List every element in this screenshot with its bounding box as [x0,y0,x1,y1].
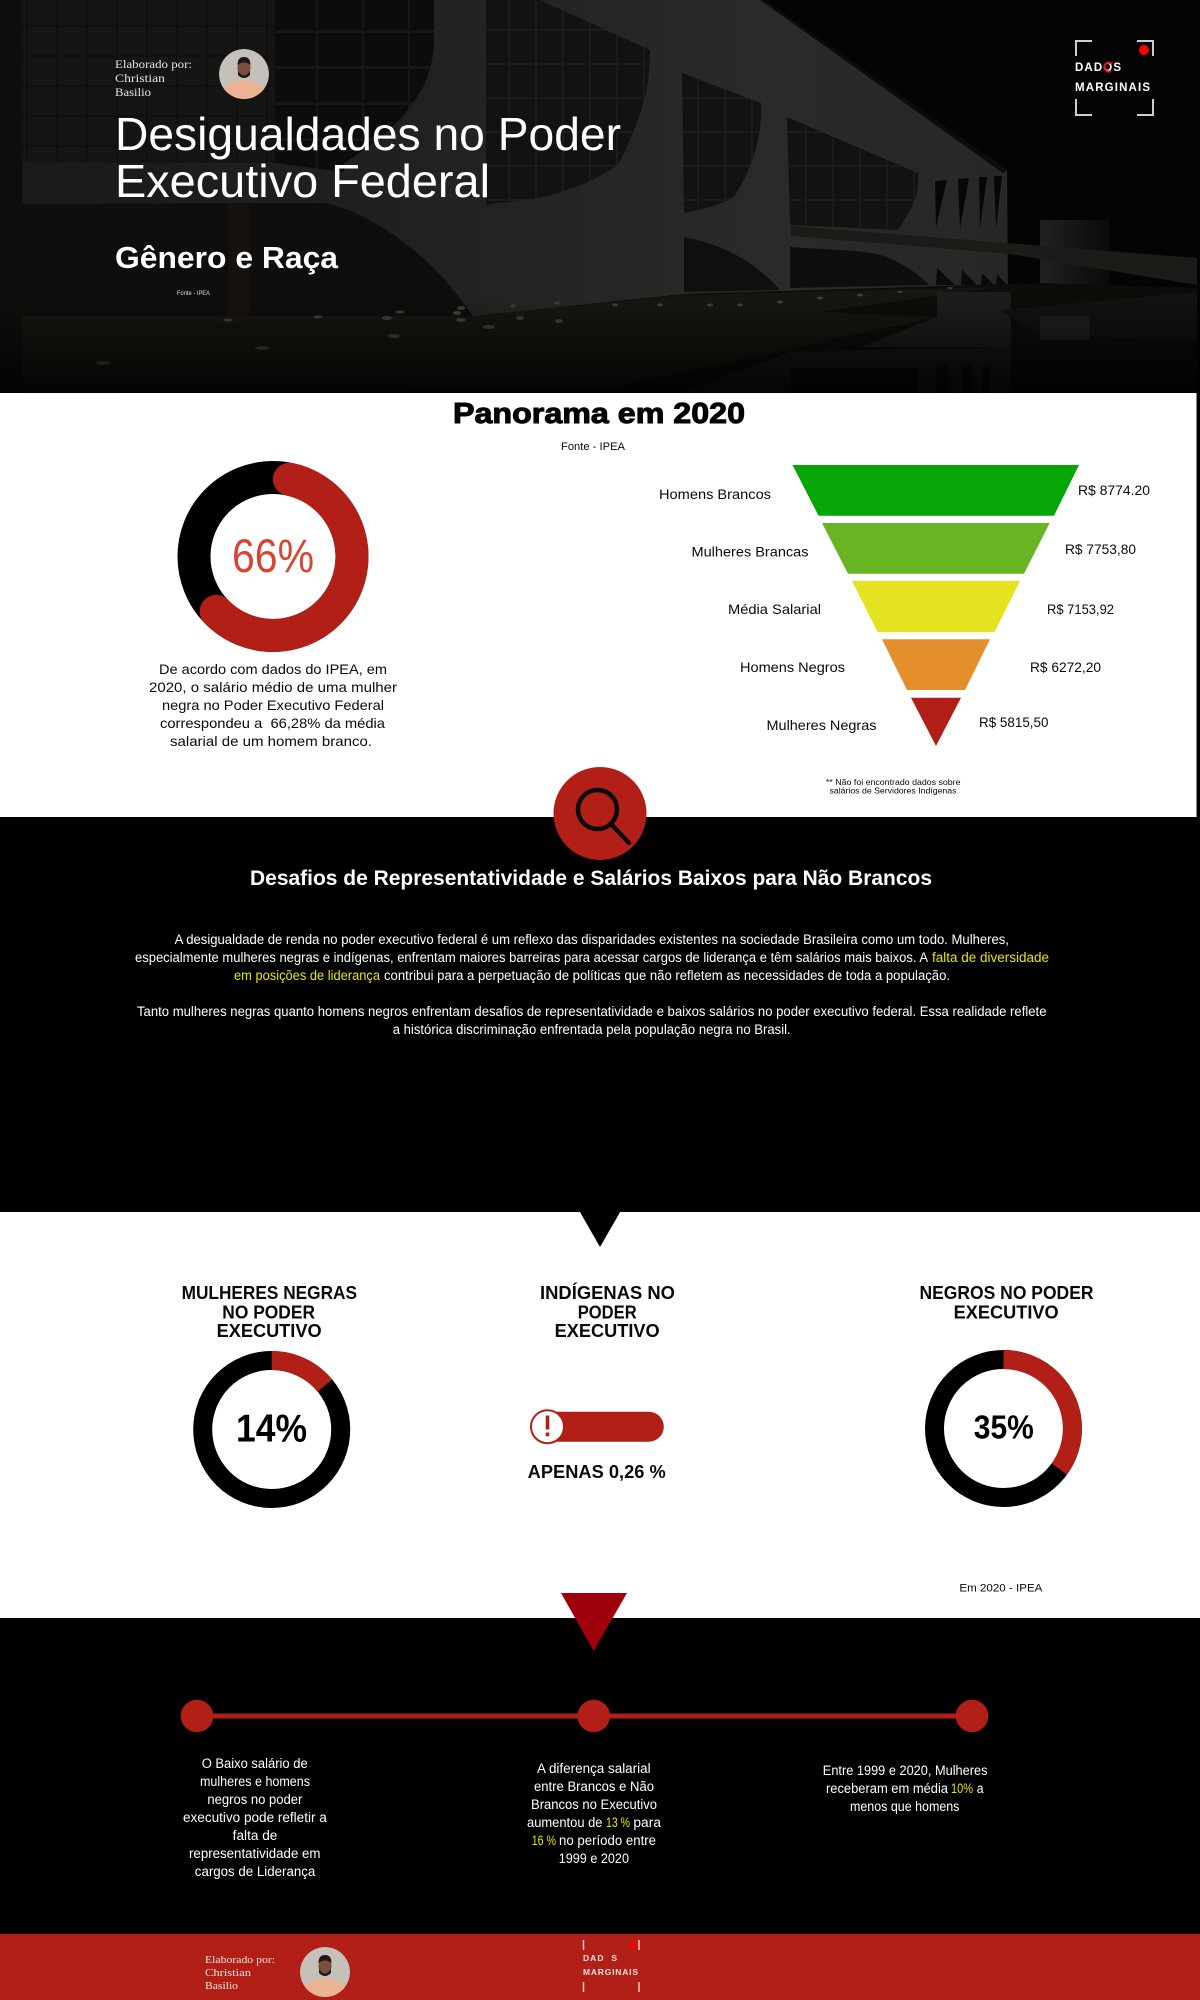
author credit: Christian [115,73,165,85]
desafios body text [135,932,1049,1037]
source note: Em 2020 - IPEA [959,1583,1043,1595]
heading: negros [920,1283,1094,1322]
funnel labels: Mulheres Negras [766,717,876,733]
footer author credit: Christian [205,1967,252,1979]
author portrait [219,49,269,99]
timeline text 2: Brancos no Executivo [531,1797,657,1812]
footer author credit: Basilio [205,1980,239,1992]
funnel values: R$ 7153,92 [1047,601,1114,617]
funnel labels [659,486,876,733]
funnel values: R$ 6272,20 [1030,659,1101,675]
footnote: salários de Servidores Indígenas [830,786,956,796]
timeline text 2: entre Brancos e Não [534,1779,654,1794]
heading: negros: EXECUTIVO [954,1302,1059,1322]
progress bar: 0,26% [531,1410,664,1443]
footnote: ** Não foi encontrado dados sobre [826,778,961,787]
timeline text 1: representatividade em [189,1846,320,1861]
logo: dados marginais: MARGINAIS [1075,82,1150,94]
timeline text 3: menos que homens [850,1799,960,1814]
arrow: black pointer [579,1211,621,1247]
panel: representatividade [0,1211,1200,1618]
timeline text 2: no período entre [559,1833,656,1848]
icon: magnifier [554,767,646,860]
author credit [115,59,192,99]
timeline text 1: mulheres e homens [200,1774,310,1789]
funnel labels: Média Salarial [728,601,821,617]
donut chart: 14% [203,1360,341,1498]
main title: Desigualdades no Poder [115,108,621,160]
donut description: correspondeu a 66,28% da média [160,715,385,731]
main title [115,108,621,207]
desafios body text: a histórica discriminação enfrentada pela população negra no Brasil. [393,1022,791,1037]
timeline text 1: O Baixo salário de [202,1756,308,1771]
timeline text 1: falta de [233,1828,277,1843]
desafios body text: A desigualdade de renda no poder executivo federal é um reflexo das disparidades existentes na sociedade Brasileira como um todo. Mulheres, [175,932,1009,947]
hero source note: Fonte - IPEA [177,291,210,297]
timeline text 1 [183,1756,327,1879]
funnel chart: salaries [792,465,1079,746]
footer logo: MARGINAIS [583,1967,638,1977]
donut chart: 66% [194,478,352,636]
heading: mulheres negras [182,1283,357,1341]
timeline text 2: para [633,1815,661,1830]
desafios body text: contribui para a perpetuação de políticas que não refletem as necessidades de toda a população. [384,968,950,983]
panorama source: Fonte - IPEA [561,441,626,453]
timeline text 3: receberam em média [826,1781,948,1796]
main title: Executivo Federal [115,155,490,207]
logo: dados marginais [1075,41,1153,115]
heading: mulheres negras: NO PODER [222,1302,315,1322]
footer author credit [205,1954,275,1992]
footer logo: DAD S [583,1953,617,1963]
heading: mulheres negras: MULHERES NEGRAS [182,1283,357,1303]
timeline text 2: 13 % [606,1815,630,1830]
funnel values: R$ 7753,80 [1065,541,1136,557]
logo: dados marginais: DADOS [1075,62,1121,74]
author credit: Basilio [115,87,151,99]
value: apenas 0,26%: APENAS 0,26 % [528,1462,666,1482]
desafios body text: em posições de liderança [234,968,380,983]
subtitle: Gênero e Raça [115,240,339,275]
timeline text 1: negros no poder [207,1792,303,1807]
timeline text 2: A diferença salarial [537,1761,651,1776]
arrow: red pointer [561,1593,627,1651]
funnel values: R$ 8774.20 [1078,482,1150,498]
timeline track [181,1700,988,1732]
timeline text 3 [823,1763,988,1814]
footnote [826,778,961,796]
heading: indigenas [540,1282,675,1341]
funnel labels: Homens Negros [740,659,845,675]
footer logo [583,1940,639,1992]
timeline text 2: aumentou de [527,1815,602,1830]
donut description: salarial de um homem branco. [170,733,372,749]
footer author portrait [300,1947,350,1997]
panorama heading: Panorama em 2020 [453,398,745,430]
timeline text 2: 16 % [532,1833,556,1848]
donut description: De acordo com dados do IPEA, em [159,661,387,677]
panel: desafios [0,767,1200,1212]
panel: timeline [0,1593,1200,1934]
timeline text 3: 10% [951,1781,973,1796]
desafios heading: Desafios de Representatividade e Salários Baixos para Não Brancos [250,867,932,890]
donut description: negra no Poder Executivo Federal [162,697,384,713]
timeline text 2 [527,1761,661,1866]
timeline text 1: cargos de Liderança [195,1864,316,1879]
funnel labels: Mulheres Brancas [692,544,808,560]
panel: panorama em 2020 [0,393,1197,817]
funnel values [979,482,1150,730]
heading: indigenas: INDÍGENAS NO [540,1282,675,1303]
funnel values: R$ 5815,50 [979,714,1049,730]
donut chart: 35%: 35% [974,1409,1034,1446]
donut chart: 14%: 14% [236,1408,307,1451]
timeline text 2: 1999 e 2020 [559,1851,629,1866]
footer author credit: Elaborado por: [205,1954,275,1966]
footer [0,1934,1200,2000]
heading: negros: NEGROS NO PODER [920,1283,1094,1303]
donut description [149,661,397,749]
author credit: Elaborado por: [115,59,192,71]
donut description: 2020, o salário médio de uma mulher [149,679,397,695]
hero background photo [0,0,1200,393]
heading: mulheres negras: EXECUTIVO [217,1321,322,1341]
donut chart: 35% [934,1360,1072,1498]
timeline text 1: executivo pode refletir a [183,1810,327,1825]
heading: indigenas: EXECUTIVO [555,1321,660,1341]
donut chart: 66%: 66% [232,529,314,582]
heading: indigenas: PODER [578,1302,637,1322]
desafios body text: Tanto mulheres negras quanto homens negros enfrentam desafios de representatividade e baixos salários no poder executivo federal. Essa realidade reflete [137,1004,1046,1019]
funnel labels: Homens Brancos [659,486,771,502]
timeline text 3: Entre 1999 e 2020, Mulheres [823,1763,988,1778]
timeline text 3: a [977,1781,984,1796]
hero section [0,0,1200,393]
desafios body text: especialmente mulheres negras e indígenas, enfrentam maiores barreiras para acessar cargos de liderança e têm salários mais baixos. A [135,950,928,965]
desafios body text: falta de diversidade [932,950,1049,965]
